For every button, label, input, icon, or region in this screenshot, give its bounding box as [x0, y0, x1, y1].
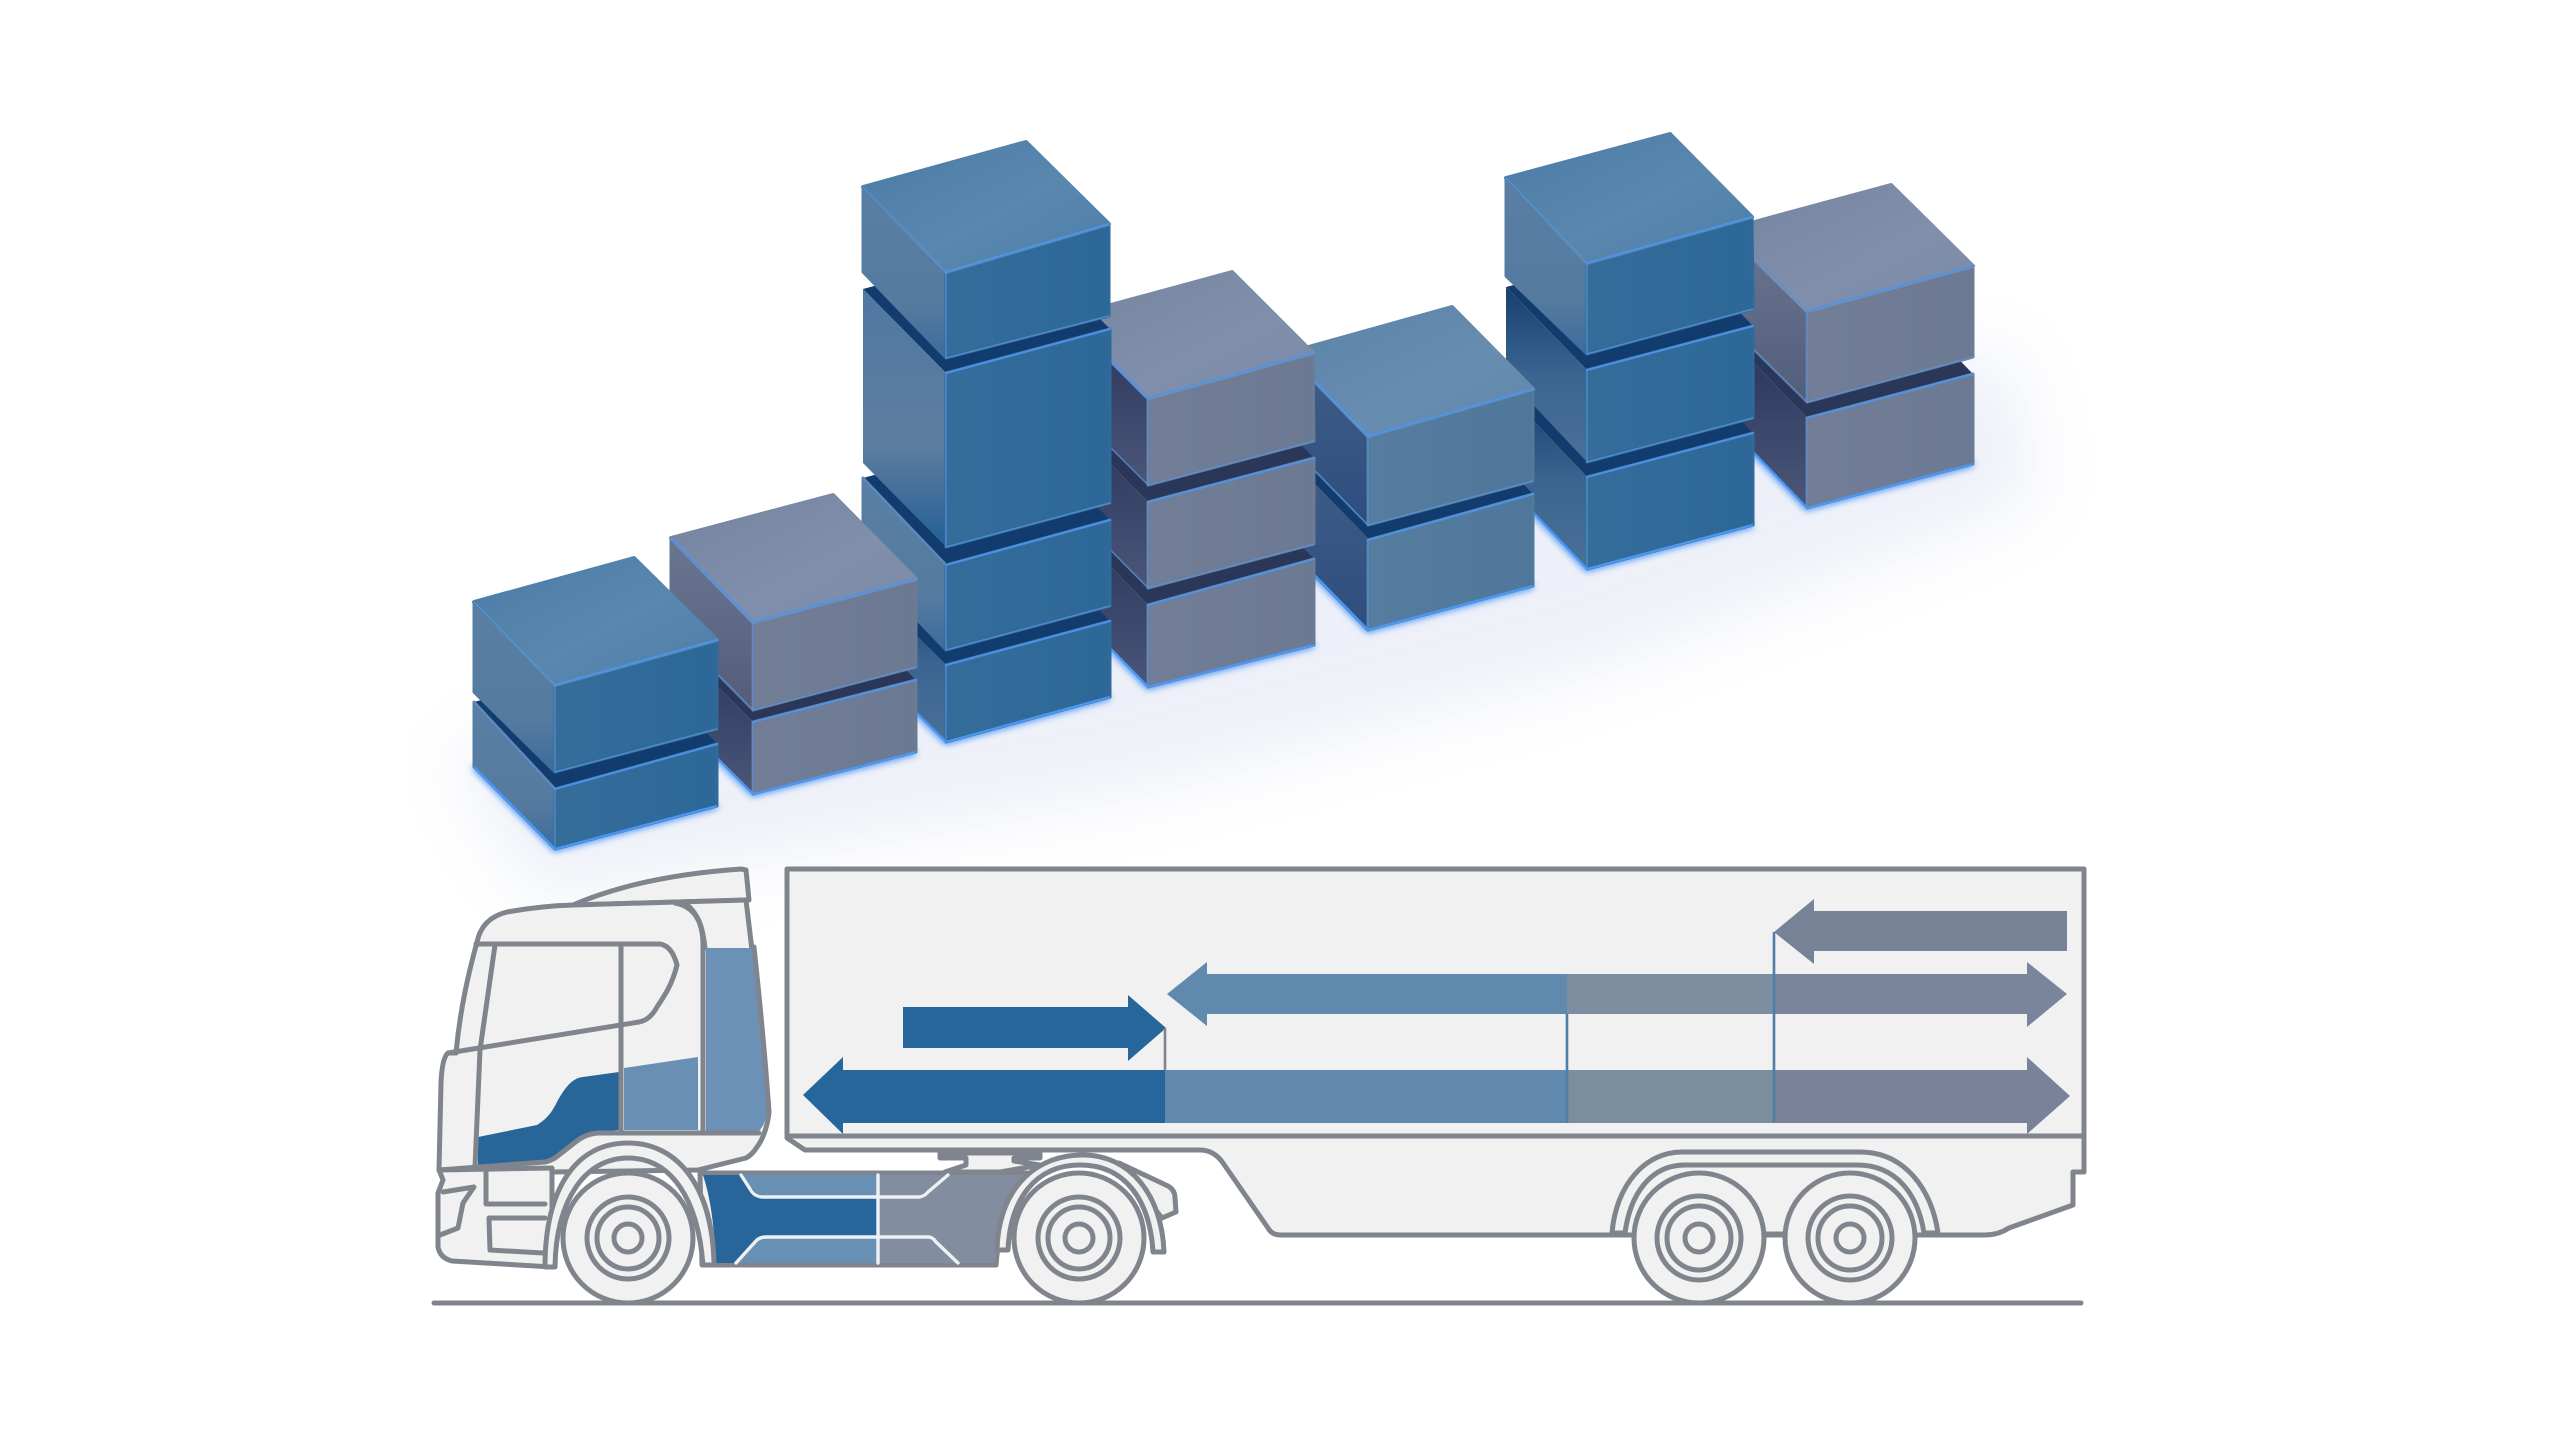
column 7 — [1725, 185, 1973, 508]
trailer body — [787, 869, 2084, 1235]
tractor front wheel — [563, 1173, 693, 1303]
arrow: top-right grey left-pointing — [1774, 899, 2067, 964]
column 3 third block — [863, 434, 1110, 650]
arrow: middle two-way segmented — [1167, 962, 2067, 1027]
roof fairing — [573, 869, 749, 905]
truck side-view diagram — [434, 869, 2084, 1303]
column 7 upper block — [1725, 185, 1973, 402]
trailer wheel 1 — [1634, 1173, 1764, 1303]
stacked block chart — [474, 134, 1973, 849]
soft shadow under blocks — [450, 350, 2040, 900]
trailer wheel arches — [1612, 1152, 1938, 1234]
cab window and pillars — [439, 944, 769, 1170]
column 6 — [1506, 134, 1753, 569]
column 4 middle block — [1067, 376, 1314, 588]
column 3 tall block — [863, 245, 1110, 547]
arrow: dark blue right-pointing short — [903, 995, 1166, 1061]
column 2 — [671, 495, 916, 794]
column 6 middle block — [1506, 243, 1753, 462]
tractor front wheel arch — [545, 1143, 714, 1267]
segment divider lines — [1165, 932, 1774, 1123]
column 1 upper block — [474, 558, 717, 772]
column 4 — [1067, 272, 1314, 687]
chassis tank panel — [700, 1173, 1027, 1265]
fifth-wheel connectors — [940, 1153, 1040, 1172]
tractor rear wheel — [1014, 1173, 1144, 1303]
column 6 top block — [1506, 134, 1753, 354]
column 4 top block — [1067, 272, 1314, 485]
trailer wheel 2 — [1785, 1173, 1915, 1303]
tractor rear mudguard — [997, 1155, 1176, 1252]
column 4 bottom block — [1067, 476, 1314, 687]
column 1 lower block — [474, 657, 717, 849]
column 2 upper block — [671, 495, 916, 710]
column 3 top block — [863, 142, 1109, 358]
arrow: bottom two-way segmented — [803, 1057, 2070, 1134]
column 5 — [1287, 307, 1533, 630]
column 3 bottom block — [863, 539, 1110, 742]
column 7 lower block — [1725, 289, 1973, 508]
column 3 — [863, 142, 1110, 742]
column 5 lower block — [1287, 411, 1533, 630]
cab door light panel — [624, 1057, 698, 1130]
column 6 bottom block — [1506, 348, 1753, 569]
front bumper — [438, 1168, 552, 1267]
ground line — [434, 1300, 2081, 1306]
column 2 lower block — [671, 598, 916, 794]
cab dark blue panel — [478, 1072, 619, 1165]
column 1 — [474, 558, 717, 849]
column 5 upper block — [1287, 307, 1533, 525]
cab rear blue panel — [706, 948, 767, 1131]
cab body — [439, 900, 769, 1172]
